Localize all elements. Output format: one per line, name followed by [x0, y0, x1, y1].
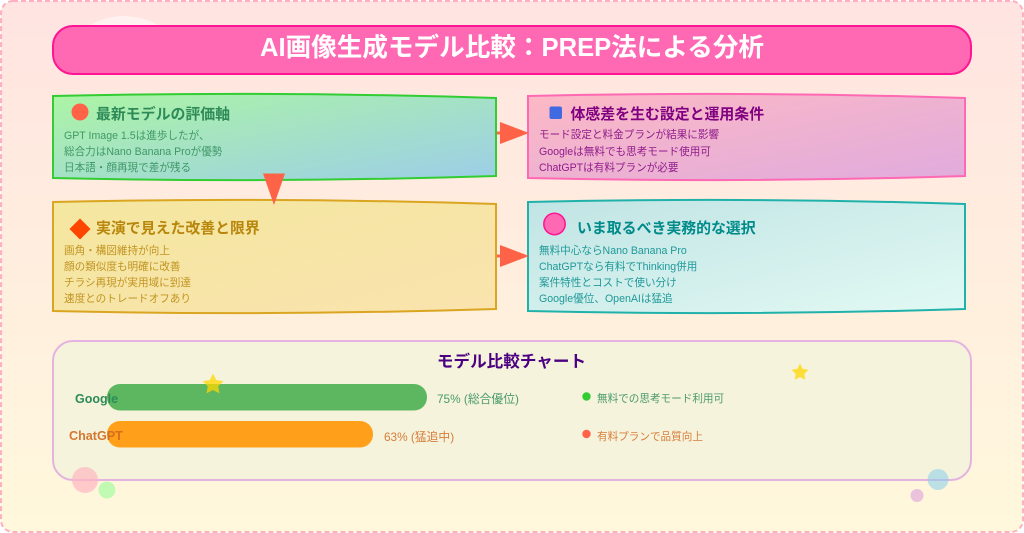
icon: star on bar [202, 374, 224, 393]
heading: evaluation axes: 最新モデルの評価軸 [96, 105, 230, 123]
chart title: モデル比較チャート [437, 351, 586, 371]
bar: Google [107, 384, 427, 410]
decorative bubble: green [98, 482, 116, 498]
icon: blue square [550, 106, 562, 119]
title banner [53, 26, 971, 74]
icon: red circle [72, 104, 88, 120]
arrow: down [263, 174, 285, 205]
text block: settings and conditions: モード設定と料金プランが結果に影響 [539, 128, 719, 141]
decorative bubble: plum [910, 489, 924, 502]
text block: settings and conditions: Googleは無料でも思考モード使用可 [539, 145, 711, 158]
panel: 体感差を生む設定と運用条件 [528, 94, 965, 180]
text block: improvements and limits: 速度とのトレードオフあり [64, 292, 191, 305]
label: ChatGPT: ChatGPT [69, 429, 123, 443]
bar: ChatGPT [107, 421, 373, 448]
text block: improvements and limits: 顔の類似度も明確に改善 [64, 260, 181, 273]
panel: 実演で見えた改善と限界 [53, 200, 496, 313]
text block: practical choices: 案件特性とコストで使い分け [539, 276, 677, 289]
panel: model comparison chart [53, 341, 971, 480]
text block: practical choices: Google優位、OpenAIは猛追 [539, 292, 673, 305]
title banner: AI画像生成モデル比較：PREP法による分析 [260, 32, 764, 62]
heading: practical choices: いま取るべき実務的な選択 [577, 219, 756, 237]
text block: practical choices: ChatGPTなら有料でThinking併用 [539, 260, 697, 273]
heading: improvements and limits: 実演で見えた改善と限界 [96, 219, 260, 237]
panel: いま取るべき実務的な選択 [528, 200, 965, 313]
legend: ChatGPT note: 有料プランで品質向上 [597, 430, 703, 443]
text block: practical choices: 無料中心ならNano Banana Pro [539, 244, 687, 257]
text block: evaluation axes: 総合力はNano Banana Proが優勢 [64, 145, 223, 158]
text block: improvements and limits: 画角・構図維持が向上 [64, 244, 170, 257]
text block: settings and conditions: ChatGPTは有料プランが必要 [539, 161, 679, 174]
icon: orange diamond [70, 218, 90, 240]
text block: evaluation axes: 日本語・顔再現で差が残る [64, 161, 191, 174]
panel: 最新モデルの評価軸 [53, 94, 496, 180]
decorative bubble: blue [928, 469, 948, 490]
icon: star top right [791, 364, 809, 380]
decorative bubble: pink [72, 467, 98, 493]
text block: evaluation axes: GPT Image 1.5は進歩したが、 [64, 129, 210, 142]
arrow: top row left to right [497, 122, 529, 144]
arrow: bottom row left to right [497, 245, 529, 267]
value: ChatGPT: 63% (猛追中) [384, 430, 454, 444]
legend: Google note: 無料での思考モード利用可 [597, 392, 725, 405]
heading: settings and conditions: 体感差を生む設定と運用条件 [570, 105, 764, 123]
text block: improvements and limits: チラシ再現が実用域に到達 [64, 276, 191, 289]
decorative circle behind title [88, 16, 160, 26]
label: Google: Google [75, 392, 118, 406]
icon: pink circle [544, 213, 565, 235]
value: Google: 75% (総合優位) [437, 392, 519, 406]
